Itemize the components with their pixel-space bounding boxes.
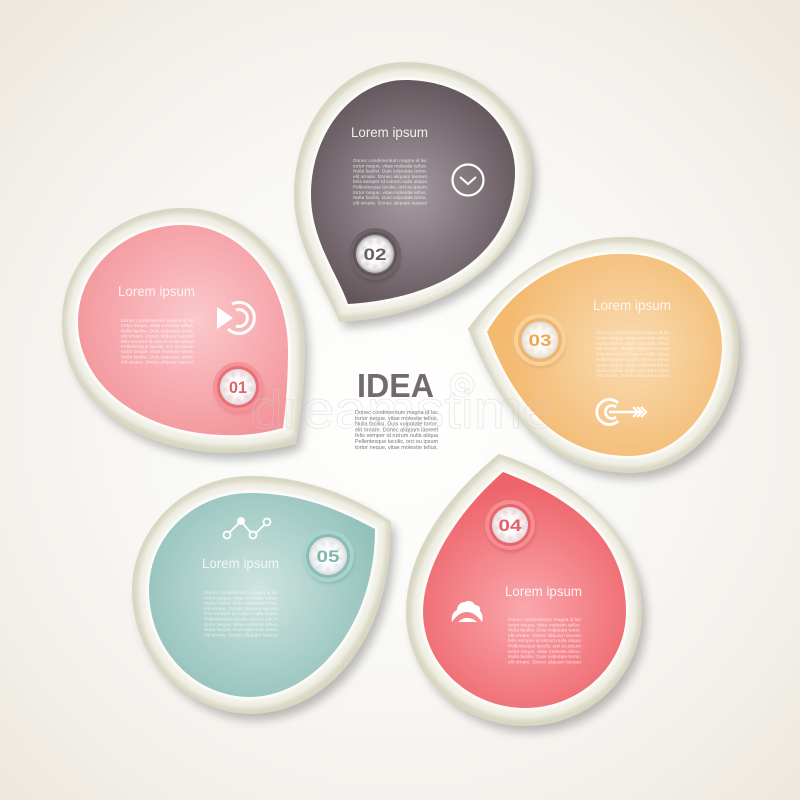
text block: step 04: Nulla facilisi. Duis vulputate tortor, xyxy=(508,654,581,659)
text block: step 03: Donec condimentum magna id lac xyxy=(596,330,670,335)
badge: 02: 02 xyxy=(364,245,386,264)
text block: step 05: tortor neque, vitae molestie tellus. xyxy=(204,622,278,627)
text block: step 01: elit ornare. Donec aliquam laoreet xyxy=(121,334,195,339)
badge: 01: 01 xyxy=(229,378,247,397)
text block: centre description: tortor neque, vitae molestie tellus. xyxy=(355,416,438,422)
text block: step 05: elit ornare. Donec aliquam laoreet xyxy=(204,606,279,611)
text block: step 03: elit ornare. Donec aliquam laoreet xyxy=(596,373,671,378)
badge: 04: 04 xyxy=(498,516,522,535)
text block: step 05: tortor neque, vitae molestie tellus. xyxy=(204,595,278,600)
text block: centre description: elit ornare. Donec aliquam laoreet xyxy=(355,427,439,433)
text block: step 04: tortor neque, vitae molestie tellus. xyxy=(508,622,581,627)
text block: step 02: tortor neque, vitae molestie tellus. xyxy=(353,190,427,195)
badge: 02 xyxy=(349,228,401,282)
text block: step 02: Nulla facilisi. Duis vulputate tortor, xyxy=(353,169,427,174)
badge: 03 xyxy=(514,314,566,368)
panel: step 02 dark petal xyxy=(295,63,536,328)
badge: 03: 03 xyxy=(528,331,552,350)
text block: step 04 xyxy=(508,617,582,664)
watermark: dreamstime xyxy=(250,380,555,440)
text block: step 04: Pellentesque iaculis, orci eu ipsum xyxy=(508,644,582,648)
text block: step 04: Donec condimentum magna id lac xyxy=(508,617,581,622)
text block: step 02: tortor neque, vitae molestie tellus. xyxy=(353,163,427,168)
text block: step 03: Pellentesque iaculis, orci eu ipsum xyxy=(596,357,671,362)
text block: step 01: felis semper id rutrum nulla aliqua xyxy=(121,339,195,344)
text block: step 05: Nulla facilisi. Duis vulputate tortor, xyxy=(204,627,278,632)
text block: step 01: Nulla facilisi. Duis vulputate tortor, xyxy=(121,328,194,333)
text block: step 01: Donec condimentum magna id lac xyxy=(121,318,194,323)
text block: step 01: tortor neque, vitae molestie tellus. xyxy=(121,349,194,354)
badge: 05 xyxy=(302,530,354,584)
badge: 04 xyxy=(485,500,536,553)
panel: step 03 orange petal xyxy=(469,238,743,479)
text block: step 02: elit ornare. Donec aliquam laoreet xyxy=(353,200,428,205)
text block: step 03: Nulla facilisi. Duis vulputate tortor, xyxy=(596,368,670,373)
text block: centre description xyxy=(355,410,439,451)
panel: step 04 red petal xyxy=(407,455,646,732)
text block: step 04: Nulla facilisi. Duis vulputate tortor, xyxy=(508,628,581,633)
heading: step 05: Lorem ipsum xyxy=(202,556,279,571)
text block: step 03: Nulla facilisi. Duis vulputate tortor, xyxy=(596,341,670,346)
text block: step 04: felis semper id rutrum nulla aliqua xyxy=(508,638,582,643)
icon: target with arrow xyxy=(597,400,646,424)
text block: step 02: Nulla facilisi. Duis vulputate tortor, xyxy=(353,195,427,200)
badge: 01 xyxy=(213,362,264,415)
text block: step 01: Nulla facilisi. Duis vulputate tortor, xyxy=(121,354,194,359)
icon: target with play arrow xyxy=(217,302,254,333)
heading: step 04: Lorem ipsum xyxy=(505,584,582,599)
badge: 05: 05 xyxy=(316,547,340,566)
text block: step 05: Pellentesque iaculis, orci eu ipsum xyxy=(204,616,279,622)
text block: step 04: tortor neque, vitae molestie tellus. xyxy=(508,649,581,654)
text block: step 01: Pellentesque iaculis, orci eu ipsum xyxy=(121,344,195,349)
text block: centre description: Nulla facilisi. Duis vulputate tortor, xyxy=(355,422,438,428)
text block: step 04: elit ornare. Donec aliquam laoreet xyxy=(508,633,582,638)
heading: step 01: Lorem ipsum xyxy=(118,284,195,299)
icon: line chart xyxy=(224,518,270,538)
heading: step 02: Lorem ipsum xyxy=(351,125,428,140)
text block: step 05: Donec condimentum magna id lac xyxy=(204,590,278,595)
panel: step 01 pink petal xyxy=(63,209,309,459)
text block: step 01 xyxy=(121,318,195,365)
text block: step 03: felis semper id rutrum nulla aliqua xyxy=(596,352,671,357)
text block: step 03: tortor neque, vitae molestie tellus. xyxy=(596,335,670,340)
text block: step 02: elit ornare. Donec aliquam laoreet xyxy=(353,174,428,179)
icon: cloud xyxy=(452,601,483,622)
text block: step 01: tortor neque, vitae molestie tellus. xyxy=(121,323,194,328)
icon: clock xyxy=(452,164,484,196)
text block: step 05 xyxy=(204,590,279,637)
text block: step 02: felis semper id rutrum nulla aliqua xyxy=(353,179,428,184)
text block: step 02: Pellentesque iaculis, orci eu ipsum xyxy=(353,184,428,190)
title: IDEA: IDEA xyxy=(357,367,434,404)
text block: centre description: Pellentesque iaculis, orci eu ipsum xyxy=(355,439,438,445)
text block: step 04: elit ornare. Donec aliquam laoreet xyxy=(508,659,582,664)
text block: centre description: tortor neque, vitae molestie tellus. xyxy=(355,445,438,451)
text block: centre description: felis semper id rutrum nulla aliqua xyxy=(355,433,438,439)
text block: step 02 xyxy=(353,158,428,205)
text block: step 01: elit ornare. Donec aliquam laoreet xyxy=(121,360,195,365)
text block: step 05: Nulla facilisi. Duis vulputate tortor, xyxy=(204,601,278,606)
text block: step 03 xyxy=(596,330,671,378)
text block: step 03: elit ornare. Donec aliquam laoreet xyxy=(596,346,671,351)
heading: step 03: Lorem ipsum xyxy=(593,298,671,313)
text block: step 03: tortor neque, vitae molestie tellus. xyxy=(596,362,670,367)
panel: step 05 teal petal xyxy=(133,477,395,720)
text block: step 05: felis semper id rutrum nulla aliqua xyxy=(204,611,279,616)
text block: step 05: elit ornare. Donec aliquam laoreet xyxy=(204,632,279,637)
text block: step 02: Donec condimentum magna id lac xyxy=(353,158,427,163)
text block: centre description: Donec condimentum magna id lac xyxy=(355,410,438,416)
